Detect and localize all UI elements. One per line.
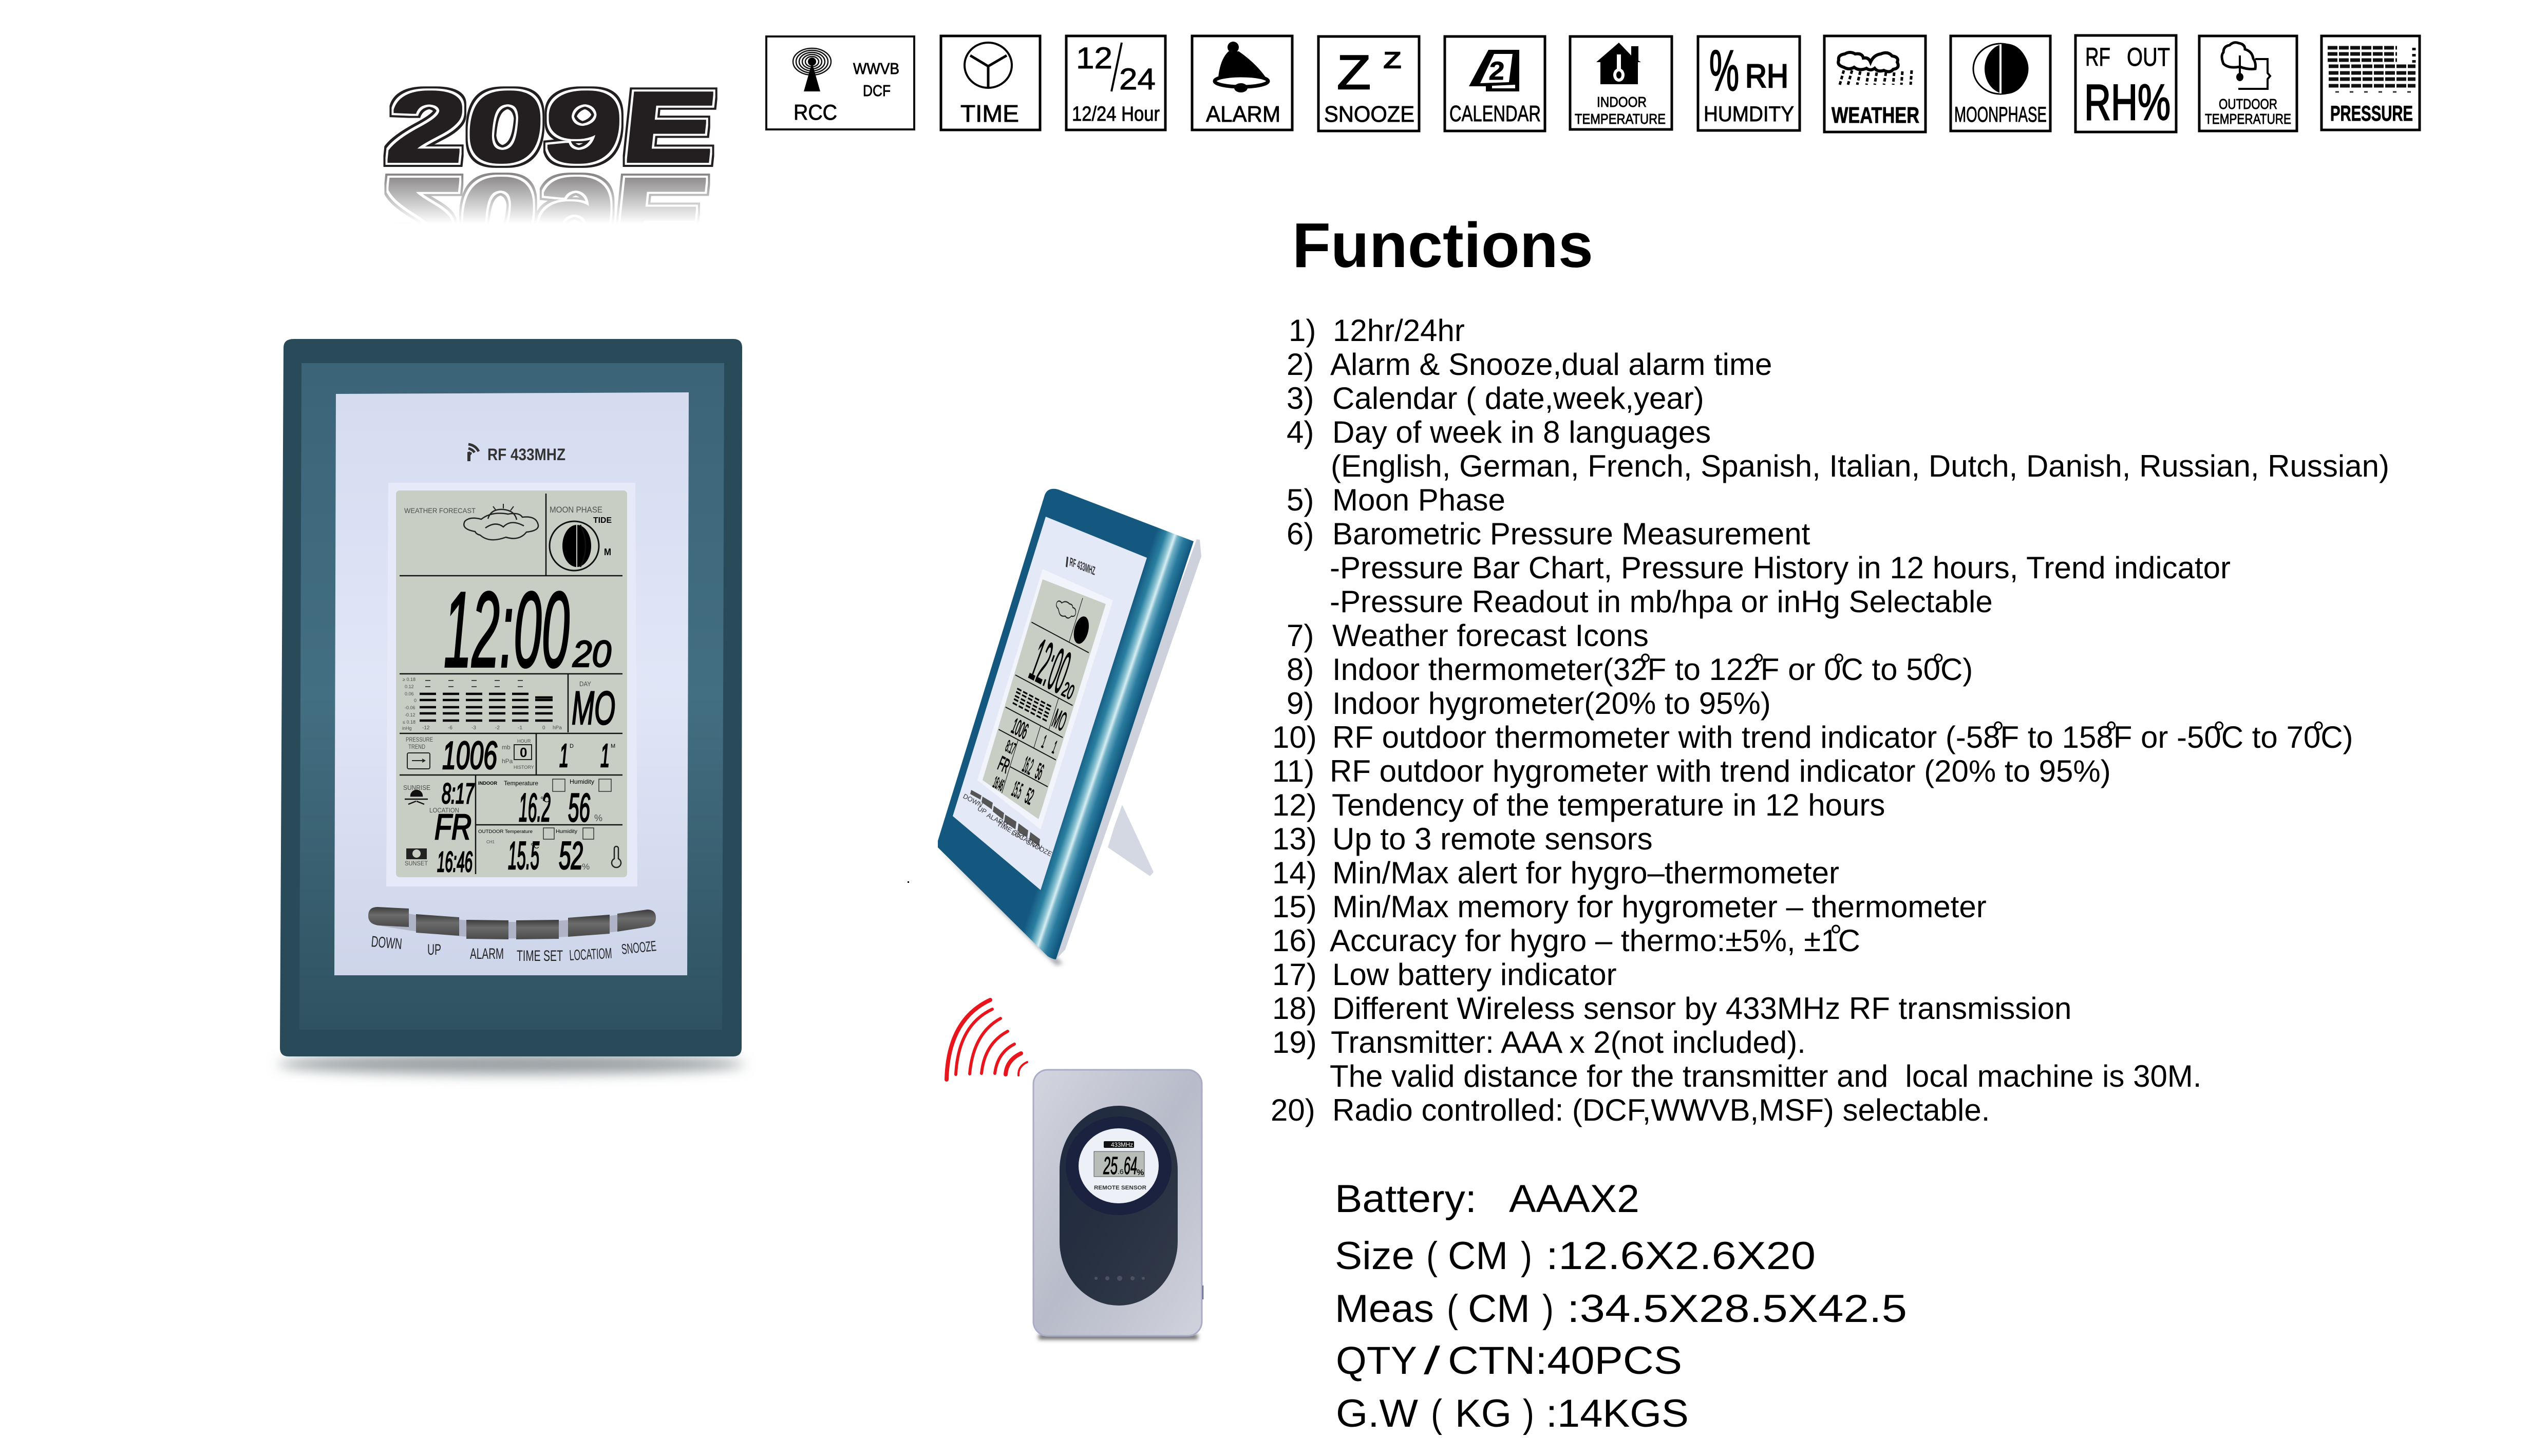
button labels: TIME SET — [517, 948, 563, 965]
icon: HUMIDITY: HUMDITY — [1704, 102, 1794, 126]
button labels: TIME SET — [996, 820, 1027, 841]
pressure bars: 0.06 — [405, 691, 414, 696]
outdoor readout: % — [582, 862, 590, 872]
LCD content — [982, 578, 1102, 816]
function list: The valid distance for the transmitter and local machine is 30M. — [1330, 1059, 2201, 1093]
pressure trend: HISTORY — [514, 765, 534, 770]
icon: SNOOZE: SNOOZE — [1324, 102, 1414, 127]
moon phase: MOON PHASE — [550, 505, 602, 515]
function list: F or -50 — [2113, 720, 2221, 754]
logo reflection: 209E — [377, 158, 712, 269]
icon: INDOOR TEMPERATURE: TEMPERATURE — [1575, 111, 1666, 127]
outdoor readout: Humidity — [556, 829, 577, 835]
function list: Alarm & Snooze,dual alarm time — [1330, 347, 1772, 382]
icon: TIME: TIME — [960, 100, 1019, 127]
function list: 10) — [1272, 720, 1317, 754]
specifications block: ( — [1431, 1392, 1442, 1435]
silver back — [1048, 539, 1201, 959]
side button — [1201, 1285, 1203, 1299]
function list: Radio controlled: (DCF,WWVB,MSF) selectable. — [1332, 1093, 1990, 1127]
icon: 12/24 hour: 24 — [1119, 63, 1156, 96]
function list — [1271, 313, 2389, 1127]
pressure bars: ≤ 0.18 — [403, 720, 416, 725]
LCD content: 12:00 — [1024, 625, 1077, 707]
function list: 18) — [1272, 991, 1317, 1026]
button labels — [962, 792, 1053, 858]
function list: Barometric Pressure Measurement — [1332, 517, 1810, 551]
function list: C) — [1940, 652, 1973, 687]
stray dot — [908, 881, 909, 883]
sunrise sunset: SUNSET — [405, 860, 428, 867]
function list: 14) — [1272, 856, 1317, 890]
specifications block: ) — [1523, 1392, 1534, 1435]
function list: F or 0 — [1761, 652, 1841, 687]
icon: RF OUT RH%: RF — [2085, 43, 2110, 71]
sensor LCD — [1094, 1151, 1144, 1180]
RF label — [1066, 554, 1096, 578]
sensor label: REMOTE SENSOR — [1094, 1185, 1146, 1191]
function list: 5) — [1287, 483, 1314, 517]
function list: 8) — [1287, 652, 1314, 687]
shadow — [940, 850, 1063, 966]
control buttons — [368, 907, 656, 939]
pressure trend: hPa — [502, 758, 513, 765]
sunrise sunset: FR — [435, 807, 471, 847]
button strip — [378, 917, 647, 930]
pressure trend: HOUR — [517, 739, 531, 744]
LCD content: 15.5 — [1009, 777, 1025, 804]
specifications block: :14KGS — [1546, 1392, 1689, 1435]
function list: 7) — [1287, 618, 1314, 653]
pressure bars: 0.12 — [405, 684, 414, 689]
LCD screen — [983, 579, 1106, 819]
function list: RF outdoor thermometer with trend indicator (-58 — [1332, 720, 2000, 754]
specifications block: Size — [1335, 1234, 1414, 1278]
function list: ° — [1830, 919, 1842, 953]
signal arcs — [947, 1000, 1027, 1080]
function list: 20) — [1271, 1093, 1315, 1127]
pressure bars: ≥ 0.18 — [403, 677, 416, 682]
icon: CALENDAR: CALENDAR — [1449, 101, 1541, 126]
icon: HUMIDITY: RH — [1745, 58, 1788, 94]
button labels: DOWN — [370, 933, 403, 953]
function list: 1) — [1289, 313, 1316, 348]
LCD screen: 12:00 — [444, 570, 570, 690]
outdoor readout: 52 — [559, 834, 583, 878]
function list: 6) — [1287, 517, 1314, 551]
pressure trend: 1006 — [442, 734, 497, 778]
icon: HUMIDITY: % — [1709, 39, 1739, 103]
icon: 12/24 hour — [1066, 36, 1165, 130]
icon: MOONPHASE — [1951, 36, 2050, 131]
function list: Day of week in 8 languages — [1332, 415, 1711, 449]
function list: RF outdoor hygrometer with trend indicator (20% to 95%) — [1330, 754, 2111, 788]
function list: F to 122 — [1648, 652, 1761, 687]
date: 1 — [559, 737, 569, 774]
specifications block: QTY — [1336, 1339, 1417, 1383]
RF label: RF 433MHZ — [1069, 555, 1096, 578]
logo text: 209E — [382, 72, 722, 183]
pressure trend: TREND — [408, 743, 425, 750]
function list: Indoor hygrometer(20% to 95%) — [1332, 686, 1771, 721]
RF label — [467, 444, 565, 464]
indoor readout — [478, 778, 611, 830]
button labels: DOWN — [962, 792, 984, 809]
stand — [1108, 805, 1154, 876]
pressure bars: -6 — [448, 725, 452, 731]
date — [559, 737, 615, 774]
function list: 3) — [1287, 381, 1314, 415]
icon: 12/24 hour: 12 — [1076, 42, 1112, 75]
function list: -Pressure Bar Chart, Pressure History in 12 hours, Trend indicator — [1330, 551, 2231, 585]
function list: Moon Phase — [1332, 483, 1505, 517]
LCD content: 1 — [1040, 731, 1048, 752]
RF label: RF 433MHZ — [487, 445, 565, 464]
icon: OUTDOOR TEMPERATURE: TEMPERATURE — [2205, 111, 2291, 127]
function list: 4) — [1287, 415, 1314, 449]
device frame — [280, 339, 742, 1056]
LCD bezel — [977, 569, 1113, 829]
moon phase: M — [604, 547, 611, 557]
sunrise sunset: LOCATION — [429, 806, 459, 814]
sensor LCD: 64 — [1124, 1152, 1137, 1180]
date: D — [570, 743, 574, 749]
function list: 16) — [1272, 923, 1317, 958]
button labels: SNOOZE — [1025, 838, 1053, 858]
frame bevel — [299, 363, 724, 1030]
icon: TIME — [941, 36, 1040, 130]
function list: Transmitter: AAA x 2(not included). — [1331, 1025, 1806, 1060]
product: angled view — [908, 489, 1201, 966]
specifications block: KG — [1455, 1392, 1512, 1435]
button labels: LOCATIOM — [569, 946, 612, 964]
date: 1 — [600, 737, 610, 774]
LCD screen: 20 — [572, 634, 611, 675]
logo: 209E — [383, 86, 718, 221]
function list: ° — [2213, 715, 2225, 750]
LCD content: FR — [996, 751, 1012, 778]
function list: ° — [1639, 648, 1652, 682]
pressure bars: -12 — [422, 725, 430, 731]
heading: Functions: Functions — [1292, 211, 1593, 281]
specifications block: CM — [1448, 1234, 1508, 1278]
specifications block: / — [1424, 1339, 1441, 1383]
sunrise sunset: SUNRISE — [403, 784, 430, 791]
pressure bars: -1 — [518, 725, 522, 731]
function list: 19) — [1272, 1025, 1317, 1060]
icon: RCC: DCF — [863, 82, 891, 100]
badge: 433MHz — [1111, 1141, 1133, 1148]
specifications block: Battery: — [1335, 1177, 1477, 1221]
icon: OUTDOOR TEMPERATURE — [2199, 36, 2297, 131]
function list: 12hr/24hr — [1333, 313, 1465, 348]
function list: Different Wireless sensor by 433MHz RF transmission — [1332, 991, 2071, 1026]
specifications block: CM — [1468, 1287, 1530, 1331]
product: remote sensor — [1033, 1070, 1203, 1339]
outdoor readout: OUTDOOR Temperature — [478, 829, 533, 834]
LCD content: 56 — [1033, 758, 1046, 785]
pressure trend: mb — [502, 744, 511, 751]
function list: Accuracy for hygro – thermo:±5%, ±1 — [1330, 923, 1838, 958]
icon: MOONPHASE: MOONPHASE — [1954, 102, 2047, 126]
button labels: UP — [427, 941, 441, 958]
LCD bezel — [386, 483, 637, 886]
icon: WEATHER: WEATHER — [1832, 103, 1919, 128]
indoor readout: INDOOR — [478, 781, 498, 786]
date: M — [611, 743, 615, 749]
function list: F to 158 — [2000, 720, 2113, 754]
function list: Low battery indicator — [1332, 957, 1617, 992]
buttons — [970, 790, 1040, 846]
icon: SNOOZE — [1318, 36, 1419, 131]
specifications block: :34.5X28.5X42.5 — [1567, 1287, 1907, 1331]
specifications block: ( — [1447, 1287, 1458, 1331]
function list: ° — [1752, 648, 1765, 682]
LCD content: 20 — [1060, 677, 1077, 705]
specifications block: ) — [1521, 1234, 1532, 1278]
outdoor readout: °C — [531, 842, 539, 850]
pressure bars: -3 — [471, 725, 476, 731]
icon: WEATHER — [1824, 36, 1926, 132]
weather forecast — [404, 504, 538, 540]
weather forecast: WEATHER FORECAST — [404, 506, 476, 515]
LCD content: 1 — [1050, 737, 1059, 758]
function list: ° — [1992, 715, 2005, 750]
white panel — [334, 392, 689, 975]
function list: 17) — [1272, 957, 1317, 992]
specifications block: ( — [1426, 1234, 1438, 1278]
function list: Up to 3 remote sensors — [1332, 822, 1653, 856]
pressure bars: inHg — [402, 726, 412, 731]
LCD content: 8:17 — [1004, 737, 1017, 759]
icon: OUTDOOR TEMPERATURE: OUTDOOR — [2219, 96, 2277, 112]
pressure bars — [402, 677, 562, 731]
specifications block: Meas — [1335, 1287, 1434, 1331]
function list: C — [1838, 923, 1860, 958]
icon: CALENDAR — [1445, 36, 1545, 131]
specifications block: AAAX2 — [1509, 1177, 1639, 1221]
icon: RF OUT RH%: RH% — [2084, 74, 2170, 130]
sensor LCD: 25 — [1103, 1152, 1118, 1180]
LCD content: MO — [1049, 703, 1069, 737]
pressure bars: -0.12 — [405, 712, 416, 717]
function list: 2) — [1287, 347, 1314, 382]
indoor readout: °C — [540, 796, 550, 804]
function list: 9) — [1287, 686, 1314, 721]
function list: 15) — [1272, 890, 1317, 924]
pressure bars: -0.06 — [405, 705, 416, 710]
icon: ALARM — [1192, 36, 1292, 130]
function list: -Pressure Readout in mb/hpa or inHg Selectable — [1330, 584, 1993, 619]
function list: C to 70 — [2221, 720, 2320, 754]
function list: Min/Max memory for hygrometer – thermometer — [1332, 890, 1987, 924]
day: MO — [572, 682, 615, 734]
sensor LCD: % — [1137, 1168, 1144, 1177]
pressure bars: hPa — [553, 725, 562, 731]
icon: RCC: RCC — [794, 100, 837, 124]
dark oval — [1060, 1106, 1178, 1306]
icon: RCC — [766, 36, 914, 129]
ring — [1066, 1117, 1172, 1215]
LCD screen — [396, 490, 627, 878]
pressure bars: -2 — [495, 725, 500, 731]
indoor readout: 16.2 — [519, 785, 551, 830]
sensor body — [1033, 1070, 1202, 1336]
indoor readout: 56 — [568, 785, 590, 830]
function list: Calendar ( date,week,year) — [1332, 381, 1704, 415]
sensor LCD: .6 — [1118, 1167, 1124, 1176]
sunrise sunset: 16:46 — [437, 845, 473, 878]
function list: ° — [1833, 648, 1845, 682]
icon: HUMIDITY — [1698, 36, 1800, 130]
function list: Indoor thermometer(32 — [1332, 652, 1648, 687]
icon: SNOOZE: Z — [1384, 48, 1401, 73]
function list: C to 50 — [1841, 652, 1940, 687]
function list: ° — [2312, 715, 2325, 750]
product: main weather station front view — [277, 339, 745, 1074]
button labels: ALARM — [986, 811, 1009, 829]
sunrise sunset: 8:17 — [442, 777, 475, 809]
sensor face — [1079, 1128, 1159, 1203]
pressure trend — [406, 734, 534, 778]
device shadow — [277, 1054, 745, 1074]
icon: RF OUT RH% — [2075, 35, 2176, 132]
function list: Weather forecast Icons — [1332, 618, 1649, 653]
moon phase: TIDE — [593, 516, 612, 525]
function list: 12) — [1272, 788, 1317, 822]
pressure trend: PRESSURE — [406, 736, 433, 743]
LCD content: 52 — [1023, 783, 1036, 810]
pressure bars: 0 — [542, 725, 545, 731]
button labels: SNOOZE — [620, 938, 657, 957]
pressure bars: 0 — [414, 698, 417, 703]
specifications block — [1335, 1177, 1907, 1435]
specifications block: ) — [1542, 1287, 1554, 1331]
function list: 13) — [1272, 822, 1317, 856]
icon: INDOOR TEMPERATURE — [1570, 36, 1672, 129]
icon: INDOOR TEMPERATURE: INDOOR — [1597, 94, 1647, 110]
function list: Tendency of the temperature in 12 hours — [1332, 788, 1885, 822]
outdoor readout: 15.5 — [508, 834, 539, 878]
specifications block: G.W — [1336, 1392, 1418, 1435]
sensor shadow — [1039, 1334, 1198, 1339]
indoor readout: % — [594, 813, 602, 823]
indoor readout: Temperature — [504, 780, 538, 787]
function list: C) — [2320, 720, 2353, 754]
day: DAY — [579, 680, 591, 688]
indoor readout: Humidity — [570, 778, 594, 785]
function list: Min/Max alert for hygro–thermometer — [1332, 856, 1839, 890]
moon phase — [550, 505, 612, 571]
LCD content: 1006 — [1009, 713, 1030, 744]
outdoor readout: CH1 — [486, 840, 495, 844]
icon: 12/24 hour: 12/24 Hour — [1072, 103, 1160, 125]
button labels — [370, 933, 657, 965]
icon: PRESSURE — [2321, 36, 2420, 130]
pressure trend: 0 — [520, 745, 527, 760]
button labels: ALARM — [470, 946, 504, 962]
day — [572, 680, 615, 734]
icon: SNOOZE: Z — [1337, 45, 1371, 99]
white panel — [953, 517, 1147, 890]
outdoor readout — [478, 828, 621, 878]
icon: RF OUT RH%: OUT — [2127, 43, 2170, 71]
function list: ° — [2105, 715, 2118, 750]
icon row: feature icons — [766, 35, 2420, 132]
sunrise sunset — [403, 777, 475, 878]
specifications block: CTN:40PCS — [1448, 1339, 1682, 1383]
blue frame — [938, 489, 1194, 959]
function list: ° — [1932, 648, 1945, 682]
icon: PRESSURE: PRESSURE — [2330, 101, 2413, 125]
button labels: UP — [976, 804, 988, 816]
icon: CALENDAR: 2 — [1488, 56, 1505, 85]
icon: ALARM: ALARM — [1206, 102, 1280, 127]
button labels: LOCATION — [1010, 828, 1043, 851]
vent dots — [1094, 1276, 1145, 1281]
LCD content: 16:46 — [991, 773, 1006, 795]
LCD content: 16.2 — [1020, 751, 1035, 780]
function list: 11) — [1272, 754, 1314, 788]
function list: (English, German, French, Spanish, Italian, Dutch, Danish, Russian, Russian) — [1331, 449, 2389, 483]
specifications block: :12.6X2.6X20 — [1546, 1234, 1816, 1278]
icon: RCC: WWVB — [853, 60, 899, 78]
